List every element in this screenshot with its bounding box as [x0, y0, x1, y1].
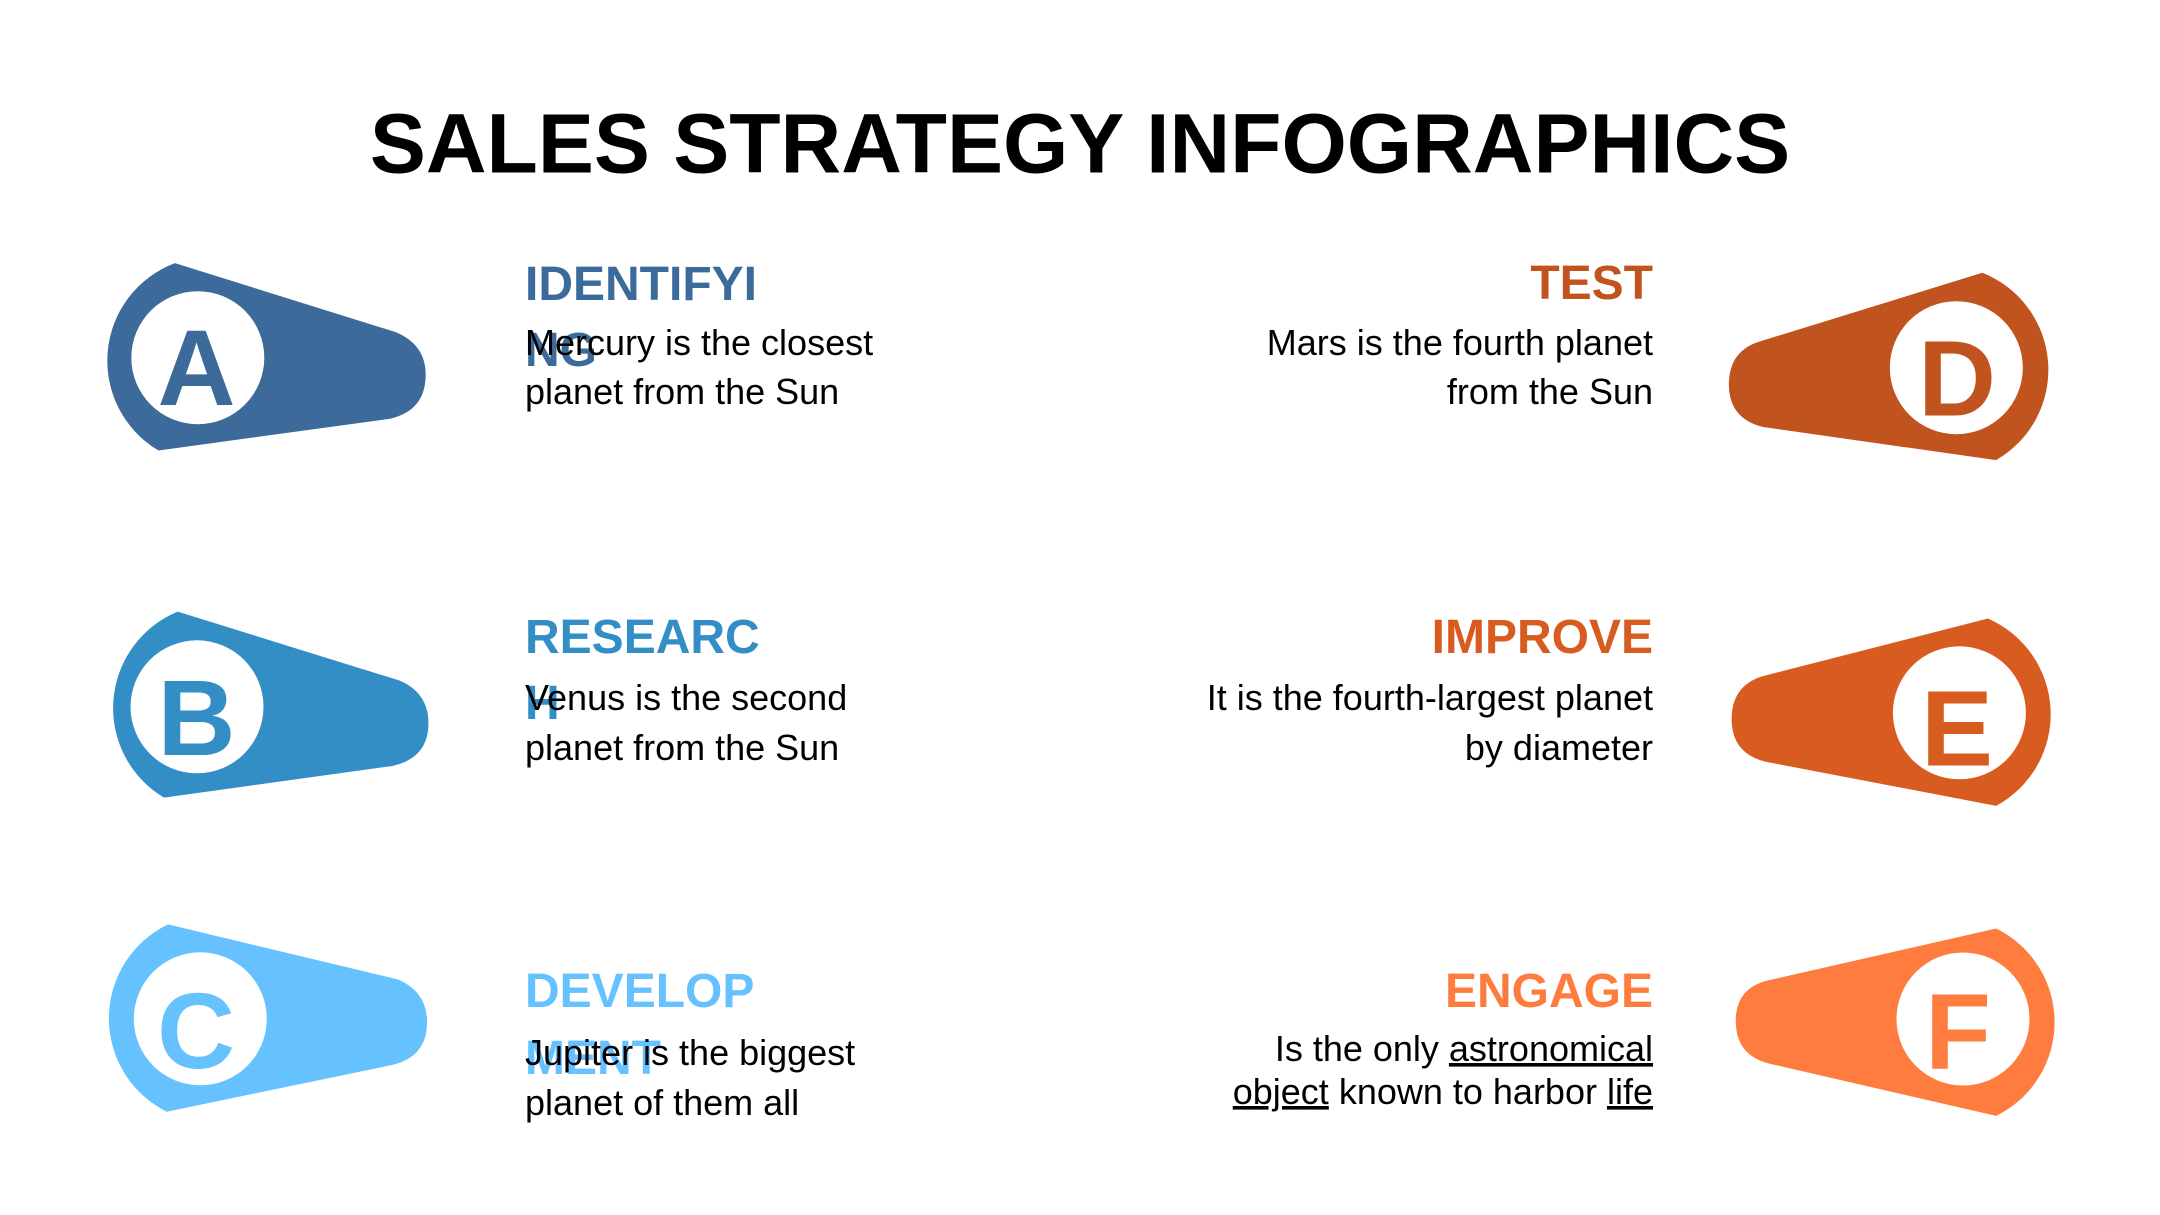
icon: B cone badge — [113, 612, 428, 798]
heading: engage: ENGAGE — [1445, 965, 1653, 1018]
text: Earth description: Is the only astronomical — [1275, 1028, 1653, 1069]
icon: A cone badge: A — [158, 307, 236, 428]
panel: F engage — [1233, 929, 2055, 1116]
text: Jupiter: Jupiter is the biggest — [525, 1032, 855, 1073]
icon: E cone badge: E — [1921, 668, 1993, 789]
heading: test: TEST — [1530, 257, 1653, 310]
text: Venus: planet from the Sun — [525, 727, 839, 768]
heading: development: MENT — [525, 1032, 661, 1085]
text: Mars: from the Sun — [1447, 371, 1653, 412]
icon: F cone badge — [1736, 929, 2055, 1116]
text: Improve description: It is the fourth-largest planet — [1207, 677, 1653, 718]
icon: C cone badge — [109, 924, 427, 1112]
icon: E cone badge — [1732, 619, 2051, 806]
title: SALES STRATEGY INFOGRAPHICS — [370, 96, 1790, 190]
panel: E improve — [1207, 611, 2051, 806]
panel: A identifying — [107, 258, 873, 450]
heading: research: H — [525, 677, 560, 730]
panel: C development — [109, 924, 855, 1123]
icon: D cone badge: D — [1918, 318, 1996, 439]
heading: improve: IMPROVE — [1432, 611, 1653, 664]
panel: D test — [1267, 257, 2048, 460]
icon: D cone badge — [1729, 273, 2048, 460]
text: Venus: Venus is the second — [525, 677, 847, 718]
text: Mars: Mars is the fourth planet — [1267, 322, 1653, 363]
text: Jupiter: planet of them all — [525, 1082, 799, 1123]
text: Mercury: planet from the Sun — [525, 371, 839, 412]
heading: identifying: IDENTIFYI — [525, 258, 757, 311]
icon: A cone badge — [107, 263, 426, 450]
heading: research: RESEARC — [525, 611, 760, 664]
text: Mercury: Mercury is the closest — [525, 322, 873, 363]
text: Improve description: by diameter — [1465, 727, 1653, 768]
icon: B cone badge: B — [158, 657, 236, 778]
icon: C cone badge: C — [157, 970, 235, 1091]
panel: B research — [113, 611, 847, 798]
text: Earth description: object known to harbor life — [1233, 1071, 1653, 1112]
heading: development: DEVELOP — [525, 965, 754, 1018]
heading: identifying: NG — [525, 324, 597, 377]
icon: F cone badge: F — [1925, 970, 1991, 1091]
